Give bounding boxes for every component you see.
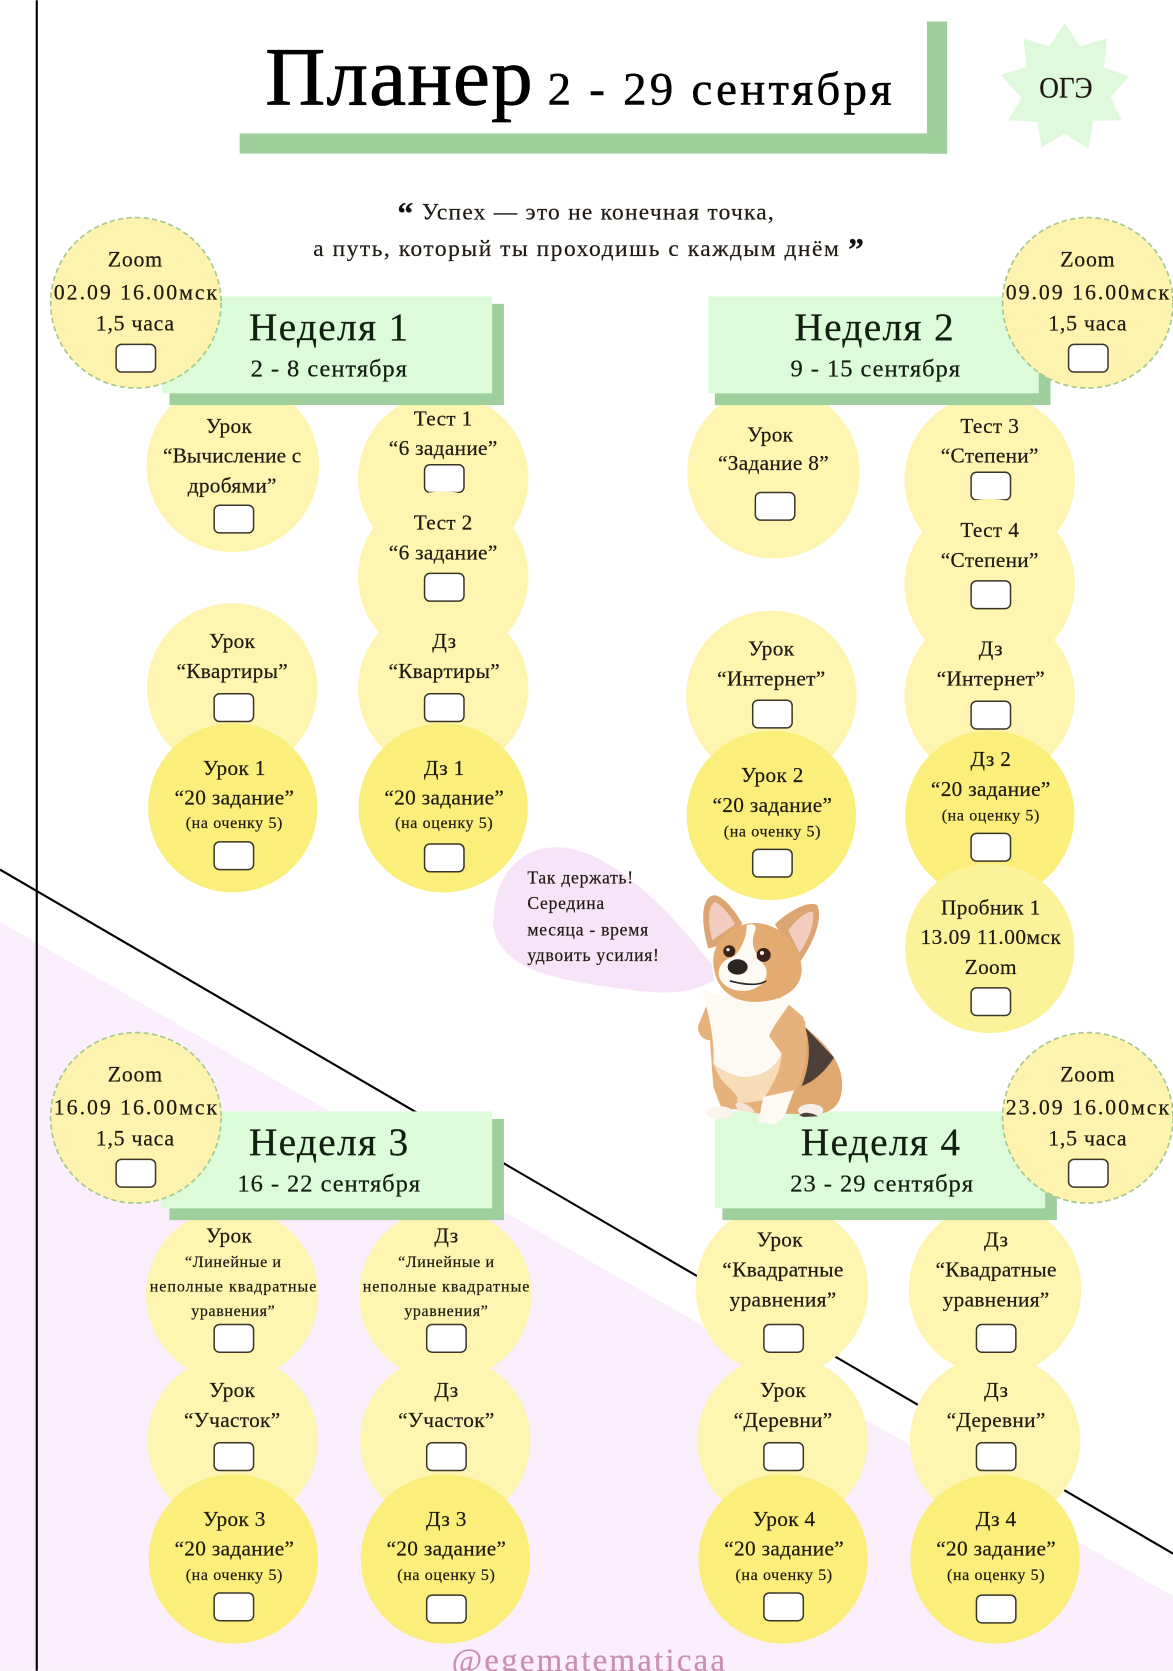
lesson: linear and incomplete quadratic equations: неполные квадратные: [150, 1278, 317, 1295]
header: week 1: 2 - 8 сентября: [251, 355, 408, 382]
lesson 2: task 20: (на оченку 5): [724, 824, 821, 841]
lesson: linear and incomplete quadratic equations: “Линейные и: [185, 1254, 282, 1271]
homework: plot: “Участок”: [398, 1408, 495, 1432]
homework: linear and incomplete quadratic equations: неполные квадратные: [363, 1278, 530, 1295]
diagonal line: [0, 870, 1173, 1554]
lesson: computing with fractions: дробями”: [188, 473, 277, 497]
speech bubble: удвоить усилия!: [527, 945, 660, 965]
homework: plot: Дз: [434, 1378, 458, 1402]
lesson 4: task 20: (на оченку 5): [735, 1567, 833, 1584]
speech bubble: [493, 847, 714, 993]
lesson: apartments: “Квартиры”: [176, 659, 288, 683]
header: week 1: [162, 296, 504, 405]
panel: week 3: [51, 1033, 532, 1644]
homework: internet: [905, 611, 1075, 781]
zoom session: week 1: Zoom: [108, 248, 163, 272]
mock exam 1: Zoom: [965, 955, 1017, 979]
zoom session: week 2: 1,5 часа: [1048, 312, 1127, 336]
homework 1: task 20: “20 задание”: [384, 786, 504, 810]
zoom session: week 1: 02.09 16.00мск: [54, 281, 218, 305]
test 1: “6 задание”: [389, 436, 498, 460]
zoom session: week 1: 1,5 часа: [96, 312, 175, 336]
heading: dates: 2 - 29 сентября: [548, 64, 892, 116]
homework: internet: Дз: [979, 636, 1003, 660]
test 3: Тест 3: [960, 414, 1019, 438]
lesson: plot: Урок: [209, 1378, 256, 1402]
test 4: Тест 4: [960, 518, 1019, 542]
test 4: [905, 499, 1075, 669]
lesson: task 8: Урок: [747, 422, 794, 446]
quote: а путь, который ты проходишь с каждым днём: [313, 236, 840, 262]
homework: villages: “Деревни”: [947, 1408, 1046, 1432]
mock exam 1: 13.09 11.00мск: [921, 925, 1061, 949]
homework 4: task 20: [910, 1474, 1080, 1644]
homework: linear and incomplete quadratic equations: уравнения”: [404, 1303, 488, 1320]
mock exam 1: [905, 864, 1074, 1033]
lesson: internet: “Интернет”: [717, 666, 826, 690]
homework 2: task 20: (на оценку 5): [942, 808, 1040, 825]
lesson: linear and incomplete quadratic equations: уравнения”: [191, 1303, 275, 1320]
speech bubble: Так держать!: [527, 867, 634, 887]
lesson 1: task 20: Урок 1: [203, 756, 266, 780]
test 2: “6 задание”: [389, 541, 498, 565]
homework: plot: [360, 1355, 531, 1526]
header: week 3: 16 - 22 сентября: [237, 1170, 421, 1197]
lesson: computing with fractions: “Вычисление с: [163, 444, 302, 468]
vertical margin line: [36, 0, 38, 1671]
header: week 2: Неделя 2: [794, 305, 955, 349]
homework 4: task 20: “20 задание”: [936, 1537, 1056, 1561]
quote: ”: [848, 232, 864, 267]
homework 1: task 20: [359, 723, 528, 892]
homework: villages: Дз: [984, 1378, 1008, 1402]
header: week 3: Неделя 3: [249, 1120, 409, 1164]
homework: apartments: “Квартиры”: [388, 659, 500, 683]
lesson 1: task 20: [148, 723, 317, 892]
homework: apartments: Дз: [432, 629, 456, 653]
header: week 4: Неделя 4: [801, 1120, 961, 1164]
homework: quadratic equations: [909, 1203, 1081, 1376]
homework 3: task 20: (на оценку 5): [397, 1567, 496, 1584]
zoom session: week 3: 1,5 часа: [96, 1127, 175, 1151]
badge: exam star: ОГЭ: [1039, 72, 1093, 105]
homework 2: task 20: Дз 2: [970, 747, 1011, 771]
lesson 3: task 20: (на оченку 5): [186, 1567, 283, 1584]
zoom session: week 4: 23.09 16.00мск: [1006, 1096, 1170, 1120]
lesson 4: task 20: “20 задание”: [724, 1537, 844, 1561]
homework: linear and incomplete quadratic equations: “Линейные и: [398, 1254, 495, 1271]
lesson 3: task 20: “20 задание”: [175, 1537, 294, 1561]
homework: quadratic equations: “Квадратные: [936, 1258, 1057, 1282]
lesson: apartments: Урок: [209, 629, 256, 653]
lesson 2: task 20: [687, 731, 856, 900]
lesson: linear and incomplete quadratic equations: Урок: [206, 1223, 252, 1247]
panel: week 1: [51, 218, 528, 892]
lesson: apartments: [147, 603, 317, 774]
homework: villages: [910, 1355, 1080, 1526]
pink background triangle: [0, 922, 1173, 1671]
lesson: task 8: [687, 386, 860, 558]
homework 2: task 20: [905, 731, 1074, 900]
zoom session: week 4: 1,5 часа: [1048, 1127, 1127, 1151]
lesson 3: task 20: Урок 3: [203, 1507, 266, 1531]
lesson: quadratic equations: [696, 1203, 868, 1376]
header: week 4: 23 - 29 сентября: [790, 1170, 974, 1197]
homework 4: task 20: (на оценку 5): [947, 1567, 1045, 1584]
homework 3: task 20: Дз 3: [426, 1507, 467, 1531]
header: week 2: 9 - 15 сентября: [791, 355, 961, 382]
zoom session: week 3: Zoom: [108, 1063, 163, 1087]
lesson: internet: [686, 611, 857, 781]
lesson: linear and incomplete quadratic equations: [146, 1208, 319, 1381]
corgi illustration: [698, 895, 842, 1124]
zoom session: week 2: Zoom: [1060, 248, 1115, 272]
header: week 1: Неделя 1: [249, 305, 409, 349]
lesson: plot: [148, 1355, 318, 1526]
zoom session: week 4: Zoom: [1060, 1063, 1115, 1087]
homework: quadratic equations: уравнения”: [943, 1287, 1050, 1311]
badge: exam star: [1001, 23, 1129, 149]
lesson: quadratic equations: Урок: [757, 1228, 803, 1252]
speech bubble: Середина: [527, 893, 605, 913]
homework: linear and incomplete quadratic equations: [359, 1208, 532, 1381]
lesson 1: task 20: “20 задание”: [175, 786, 294, 810]
zoom session: week 2: [1003, 218, 1173, 388]
lesson: villages: [697, 1355, 868, 1526]
homework 3: task 20: [361, 1474, 530, 1644]
zoom session: week 3: [51, 1033, 221, 1203]
test 3: “Степени”: [941, 444, 1039, 468]
panel: week 2: [686, 218, 1173, 1033]
test 2: [358, 491, 528, 662]
homework 3: task 20: “20 задание”: [387, 1537, 506, 1561]
lesson: villages: Урок: [760, 1378, 806, 1402]
test 2: Тест 2: [414, 511, 473, 535]
speech bubble: месяца - время: [527, 920, 649, 940]
zoom session: week 1: [51, 218, 221, 388]
lesson 2: task 20: Урок 2: [741, 763, 804, 787]
title banner: [240, 22, 947, 154]
lesson 3: task 20: [149, 1474, 318, 1644]
homework 1: task 20: Дз 1: [424, 756, 465, 780]
quote: Успех — это не конечная точка,: [422, 200, 775, 226]
test 1: Тест 1: [414, 406, 473, 430]
zoom session: week 2: 09.09 16.00мск: [1006, 281, 1170, 305]
header: week 4: [715, 1111, 1057, 1220]
lesson 4: task 20: Урок 4: [753, 1507, 816, 1531]
homework: quadratic equations: Дз: [984, 1228, 1008, 1252]
lesson: internet: Урок: [748, 636, 795, 660]
lesson 4: task 20: [698, 1474, 868, 1644]
lesson: quadratic equations: “Квадратные: [722, 1258, 844, 1282]
lesson: computing with fractions: Урок: [206, 414, 252, 438]
lesson 1: task 20: (на оченку 5): [186, 815, 283, 832]
lesson: villages: “Деревни”: [734, 1408, 833, 1432]
test 1: [358, 393, 528, 564]
zoom session: week 4: [1003, 1033, 1173, 1203]
test 3: [905, 394, 1075, 565]
zoom session: week 3: 16.09 16.00мск: [54, 1096, 218, 1120]
homework 1: task 20: (на оценку 5): [395, 815, 493, 832]
panel: week 4: [696, 1033, 1173, 1644]
lesson 2: task 20: “20 задание”: [713, 793, 832, 817]
test 4: “Степени”: [941, 548, 1039, 572]
quote: “: [397, 196, 413, 231]
homework: internet: “Интернет”: [937, 666, 1045, 690]
homework: apartments: [358, 603, 528, 774]
quote: [313, 196, 864, 267]
homework 2: task 20: “20 задание”: [931, 777, 1051, 801]
header: week 3: [162, 1111, 504, 1220]
homework 4: task 20: Дз 4: [976, 1507, 1017, 1531]
mock exam 1: Пробник 1: [941, 895, 1041, 919]
homework: linear and incomplete quadratic equations: Дз: [434, 1223, 458, 1247]
lesson: quadratic equations: уравнения”: [730, 1287, 837, 1311]
header: week 2: [708, 296, 1050, 405]
lesson: task 8: “Задание 8”: [718, 451, 829, 475]
heading: planner: Планер: [265, 31, 533, 123]
lesson: computing with fractions: [146, 380, 319, 552]
lesson: plot: “Участок”: [184, 1408, 281, 1432]
